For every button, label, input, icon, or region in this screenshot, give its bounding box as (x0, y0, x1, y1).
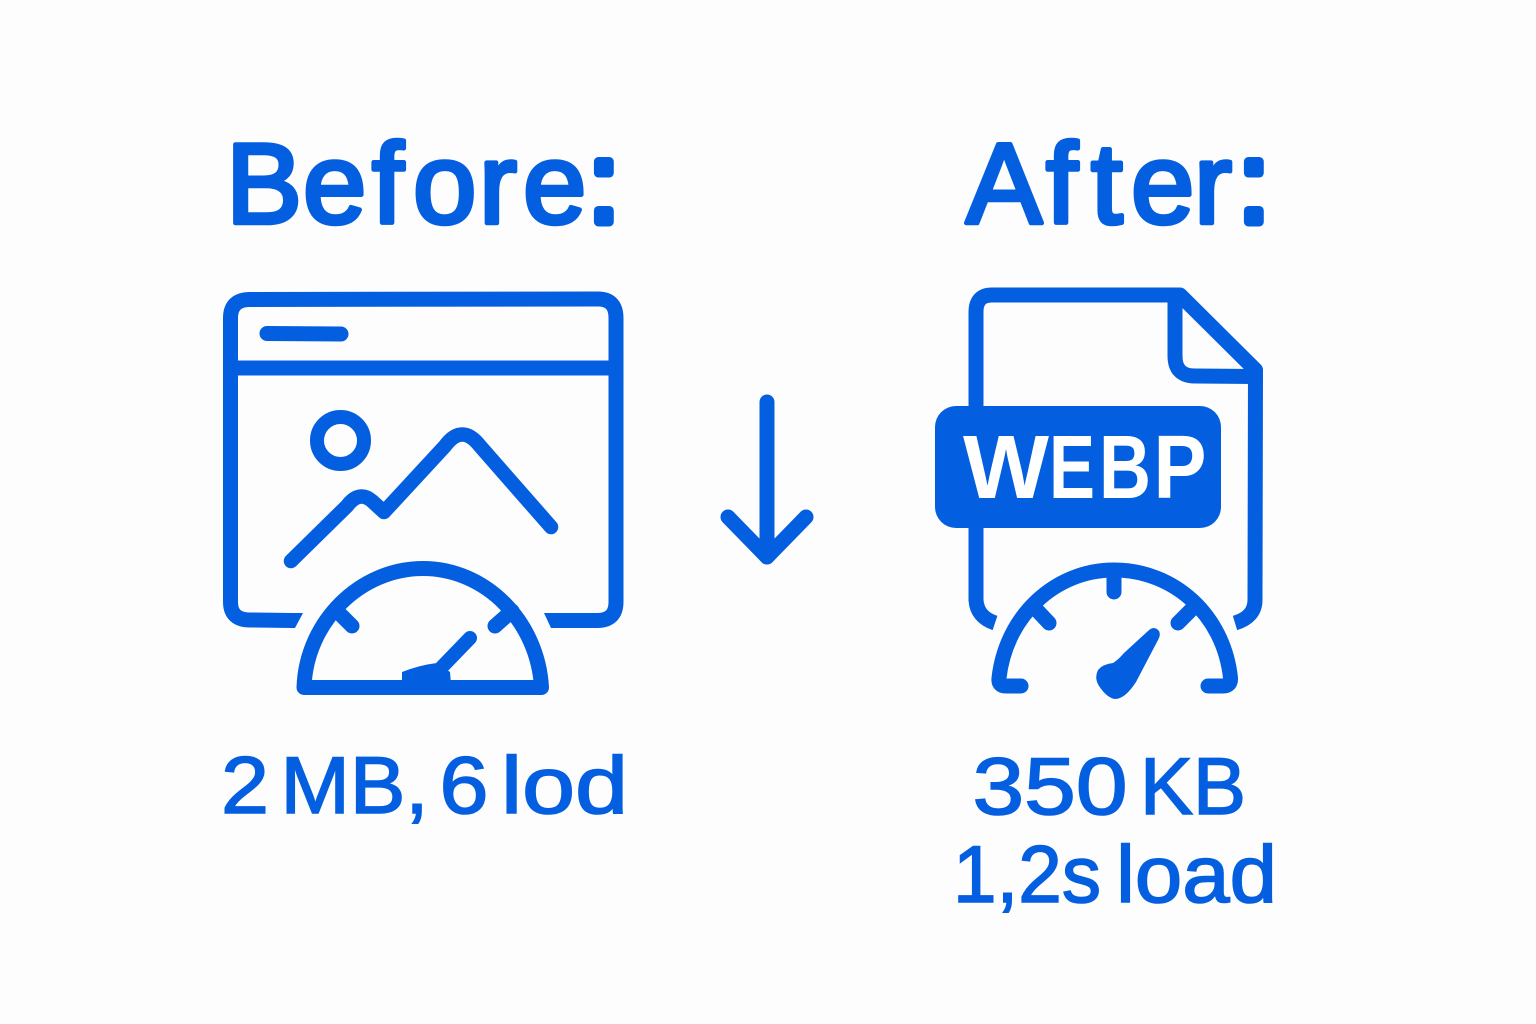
badge label: WEBP: P (1154, 418, 1206, 518)
before stats: 6 (440, 741, 488, 831)
after size (972, 742, 1246, 832)
after stats (953, 742, 1277, 920)
after size: KB (1140, 742, 1246, 832)
file type badge (935, 406, 1221, 528)
badge label: WEBP: E (1049, 418, 1095, 518)
before stats: lod (501, 741, 628, 831)
icon: browser window with image (230, 299, 616, 628)
badge label: WEBP (963, 418, 1206, 518)
icon: WEBP file (935, 295, 1256, 623)
icon: fast speedometer (999, 570, 1231, 699)
before stats: 2 (221, 741, 269, 831)
heading: Before: : (588, 120, 620, 247)
heading: Before: e (523, 121, 586, 248)
after size: 350 (972, 742, 1128, 832)
heading: After: After (966, 121, 1232, 248)
arrow: down (728, 402, 806, 557)
badge label: WEBP: B (1099, 418, 1151, 518)
after load time: load (1116, 830, 1277, 920)
heading: After: : (1238, 120, 1270, 247)
badge label: WEBP: W (963, 418, 1049, 518)
icon: slow speedometer (304, 568, 542, 688)
before stats (221, 741, 628, 831)
after load time: 1,2s (953, 830, 1101, 920)
before stats: MB, (280, 741, 428, 831)
after load time (953, 830, 1277, 920)
heading: Before: Befor (226, 121, 517, 248)
